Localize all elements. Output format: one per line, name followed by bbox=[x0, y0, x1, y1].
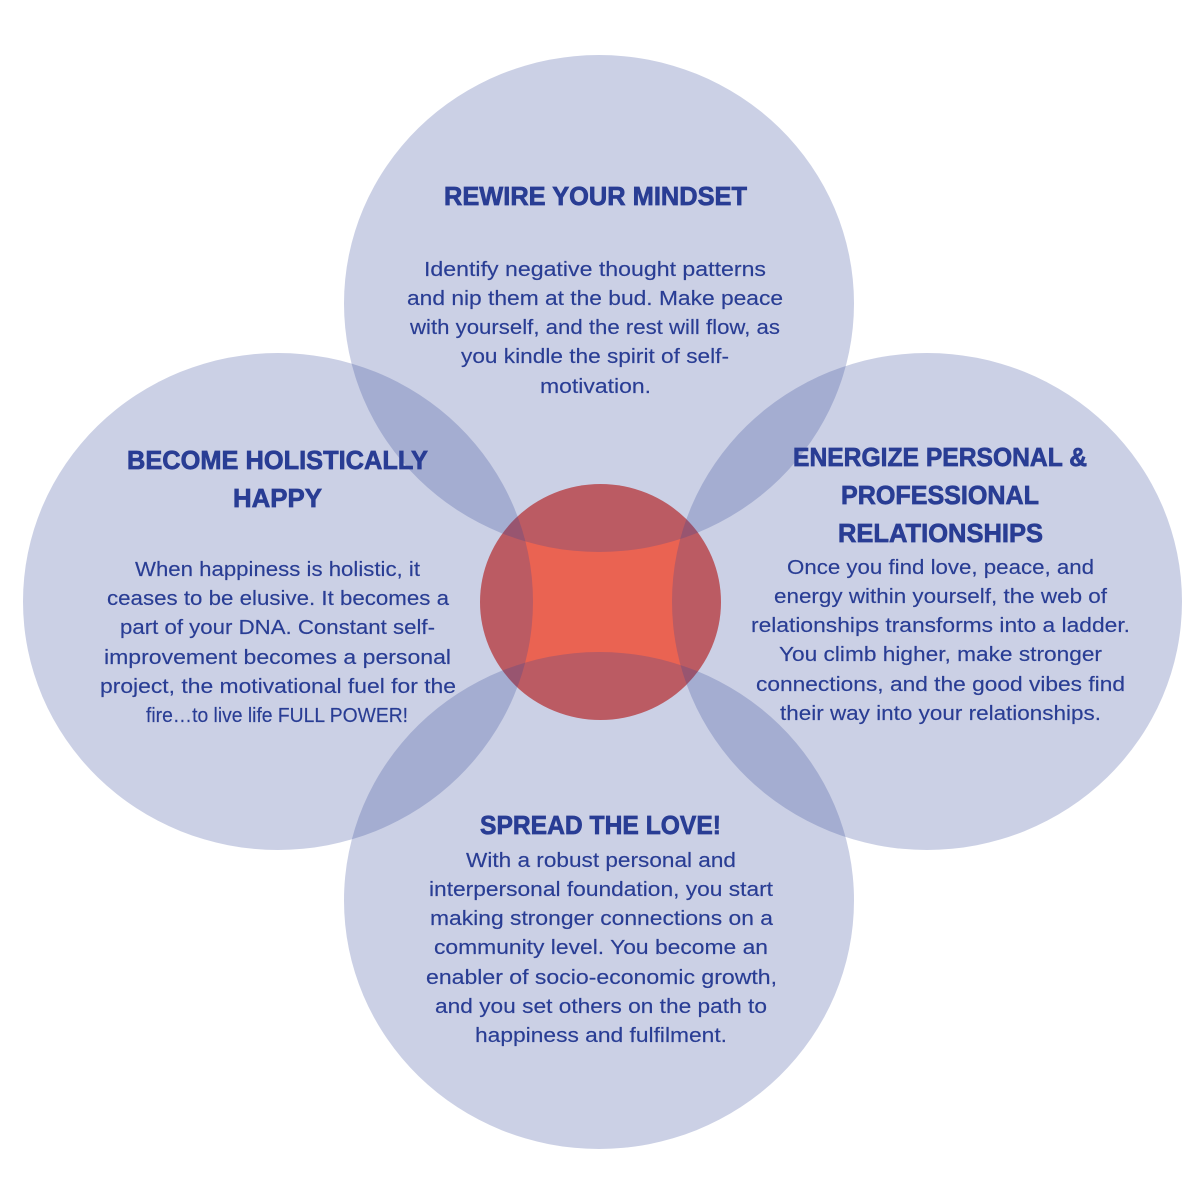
text block: become holistically happy: project, the motivational fuel for the bbox=[100, 675, 456, 698]
heading: become holistically happy bbox=[127, 445, 428, 513]
text block: become holistically happy: improvement becomes a personal bbox=[104, 646, 451, 669]
heading: energize personal and professional relationships: ENERGIZE PERSONAL & bbox=[793, 442, 1087, 472]
text block: energize personal and professional relationships: energy within yourself, the web of bbox=[774, 585, 1107, 608]
text block: energize personal and professional relationships bbox=[751, 556, 1130, 725]
text block: rewire your mindset: motivation. bbox=[540, 375, 651, 398]
text block: spread the love: With a robust personal and bbox=[466, 849, 736, 872]
text block: become holistically happy: When happiness is holistic, it bbox=[135, 558, 420, 581]
text block: become holistically happy: fire…to live life FULL POWER! bbox=[146, 704, 408, 727]
text block: rewire your mindset bbox=[407, 258, 783, 398]
circle: left bbox=[23, 353, 533, 850]
text block: rewire your mindset: with yourself, and the rest will flow, as bbox=[409, 316, 780, 339]
heading: spread the love: SPREAD THE LOVE! bbox=[480, 810, 721, 840]
text block: rewire your mindset: you kindle the spirit of self- bbox=[461, 345, 729, 368]
panel: rewire your mindset bbox=[407, 181, 783, 398]
text block: spread the love: happiness and fulfilment. bbox=[475, 1024, 727, 1047]
text block: energize personal and professional relationships: You climb higher, make stronger bbox=[779, 643, 1102, 666]
center red circle bbox=[480, 484, 721, 720]
text block: energize personal and professional relationships: connections, and the good vibes find bbox=[756, 673, 1125, 696]
text block: become holistically happy: ceases to be elusive. It becomes a bbox=[107, 587, 450, 610]
heading: become holistically happy: HAPPY bbox=[233, 483, 322, 513]
panel: energize personal and professional relationships bbox=[751, 442, 1130, 725]
text block: spread the love: making stronger connections on a bbox=[430, 907, 774, 930]
text block: spread the love: enabler of socio-economic growth, bbox=[426, 966, 777, 989]
heading: energize personal and professional relationships: PROFESSIONAL bbox=[841, 480, 1039, 510]
heading: energize personal and professional relationships: RELATIONSHIPS bbox=[838, 518, 1043, 548]
heading: become holistically happy: BECOME HOLISTICALLY bbox=[127, 445, 428, 475]
text block: energize personal and professional relationships: Once you find love, peace, and bbox=[787, 556, 1094, 579]
text block: energize personal and professional relationships: relationships transforms into a ladder. bbox=[751, 614, 1130, 637]
heading: energize personal and professional relationships bbox=[793, 442, 1087, 548]
text block: spread the love: and you set others on the path to bbox=[435, 995, 767, 1018]
text block: become holistically happy: part of your DNA. Constant self- bbox=[120, 616, 435, 639]
text block: spread the love bbox=[426, 849, 777, 1047]
text block: rewire your mindset: and nip them at the bud. Make peace bbox=[407, 287, 783, 310]
panel: spread the love bbox=[426, 810, 777, 1047]
text block: spread the love: interpersonal foundation, you start bbox=[429, 878, 773, 901]
circle: right bbox=[672, 353, 1182, 850]
panel: become holistically happy bbox=[100, 445, 456, 727]
circle: top bbox=[344, 55, 854, 552]
circle: bottom bbox=[344, 652, 854, 1149]
text block: energize personal and professional relationships: their way into your relationships. bbox=[780, 702, 1101, 725]
heading: rewire your mindset: REWIRE YOUR MINDSET bbox=[444, 181, 747, 211]
text block: spread the love: community level. You become an bbox=[434, 936, 768, 959]
text block: become holistically happy bbox=[100, 558, 456, 727]
text block: rewire your mindset: Identify negative thought patterns bbox=[424, 258, 766, 281]
